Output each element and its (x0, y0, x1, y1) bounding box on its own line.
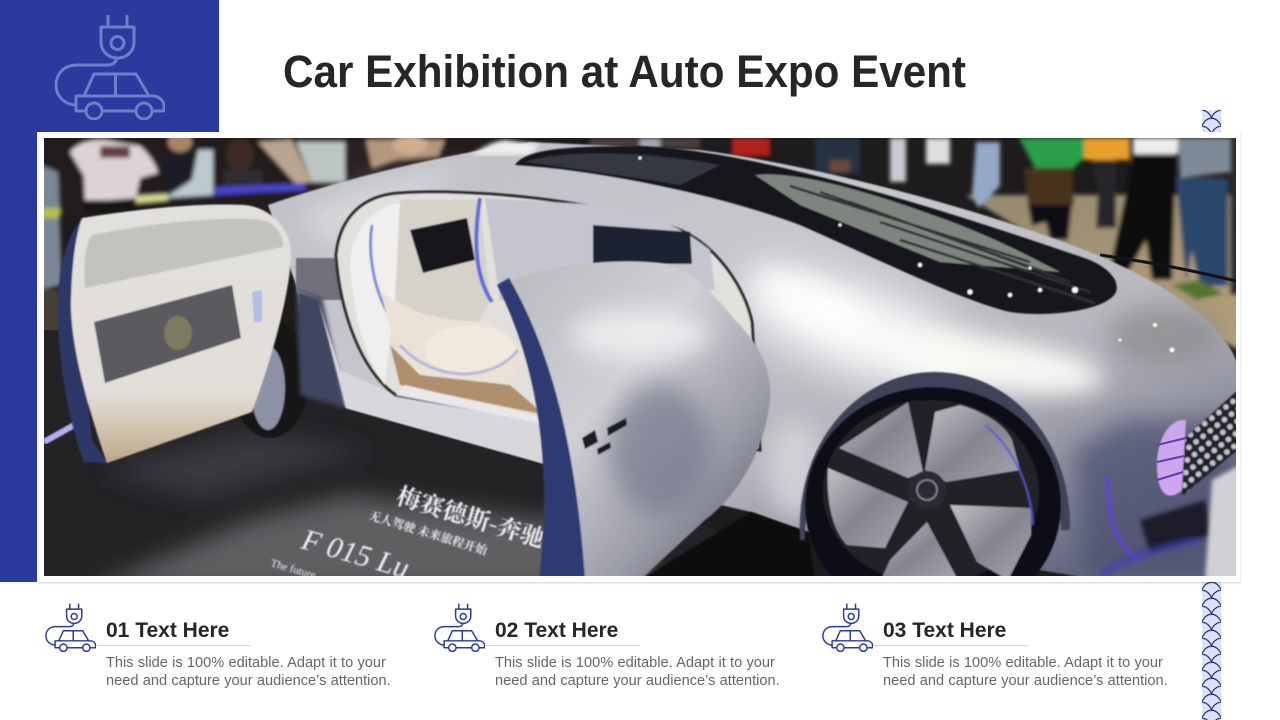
panel: white photo frame (37, 132, 1240, 582)
photo: silver concept car at expo (44, 138, 1236, 576)
photo: interior cabin (336, 192, 760, 450)
panel: blue accent background (0, 0, 219, 582)
item 01 (45, 604, 391, 689)
icon: electric car plug, large (54, 15, 165, 120)
photo: floor projection text: 无人驾驶 未来旅程开始 (367, 507, 490, 559)
photo: stage floor (40, 330, 830, 590)
photo: front grille and purple lights (1100, 388, 1240, 576)
description 01: This slide is 100% editable. Adapt it to your (106, 655, 386, 671)
description 03: This slide is 100% editable. Adapt it to your (883, 655, 1163, 671)
photo: rear wheel (240, 330, 306, 438)
photo: foreground open door (497, 261, 770, 580)
icon: car plug 03 (822, 604, 873, 652)
description 01 (106, 655, 391, 689)
photo background: crowd and floor (40, 132, 1240, 576)
photo: floor projection text (271, 484, 544, 576)
description 02: This slide is 100% editable. Adapt it to your (495, 655, 775, 671)
heading 01: 01 Text Here (106, 619, 229, 642)
decorative patterned strips (1202, 110, 1221, 720)
description 02: need and capture your audience’s attention. (495, 673, 780, 689)
description 01: need and capture your audience’s attention. (106, 673, 391, 689)
photo: front wheel (798, 370, 1071, 576)
photo: open rear door (58, 204, 291, 463)
photo: glass roof (515, 146, 1174, 352)
description 03: need and capture your audience’s attention. (883, 673, 1168, 689)
item 02 (434, 604, 780, 689)
item 03 (822, 604, 1168, 689)
description 03 (883, 655, 1168, 689)
photo: car body (268, 140, 1240, 580)
heading 03: 03 Text Here (883, 619, 1006, 642)
description 02 (495, 655, 780, 689)
heading 02: 02 Text Here (495, 619, 618, 642)
photo: floor projection text: 梅赛德斯-奔驰 (393, 476, 549, 554)
icon: car plug 02 (434, 604, 485, 652)
photo: floor projection text: ioM (583, 511, 623, 546)
icon: car plug 01 (45, 604, 96, 652)
